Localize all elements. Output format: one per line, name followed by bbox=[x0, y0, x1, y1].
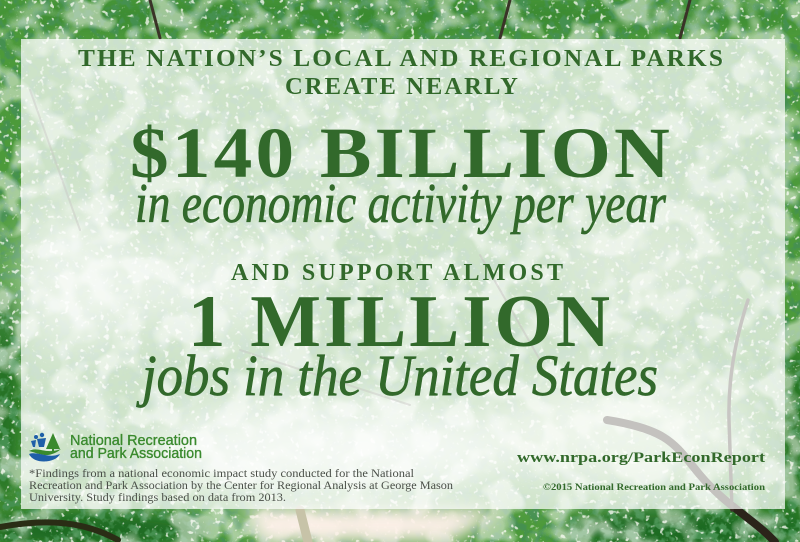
heading: the nation's local and regional parks: THE NATION’S LOCAL AND REGIONAL PARKS bbox=[78, 46, 725, 72]
website url: www.nrpa.org/ParkEconReport bbox=[517, 450, 765, 466]
headline figure: 1 million: 1 MILLION bbox=[188, 281, 613, 363]
icon: people, tree and water bbox=[29, 433, 61, 462]
script line: jobs in the United States: jobs in the United States bbox=[136, 343, 658, 408]
heading: and support almost: AND SUPPORT ALMOST bbox=[231, 260, 565, 286]
logo: National Recreation and Park Association bbox=[29, 432, 202, 462]
logo text line 1: National Recreation bbox=[70, 432, 197, 449]
heading: create nearly: CREATE NEARLY bbox=[285, 74, 520, 100]
copyright line: ©2015 National Recreation and Park Association bbox=[543, 482, 766, 493]
script line: in economic activity per year: in economic activity per year bbox=[135, 173, 666, 235]
footnote bbox=[29, 468, 453, 504]
footnote: Recreation and Park Association by the Center for Regional Analysis at George Mason bbox=[29, 480, 453, 492]
footnote: University. Study findings based on data from 2013. bbox=[29, 492, 286, 504]
logo text line 2: and Park Association bbox=[70, 445, 202, 462]
headline figure: $140 billion: $140 BILLION bbox=[130, 113, 673, 193]
footnote: *Findings from a national economic impact study conducted for the National bbox=[29, 468, 414, 480]
